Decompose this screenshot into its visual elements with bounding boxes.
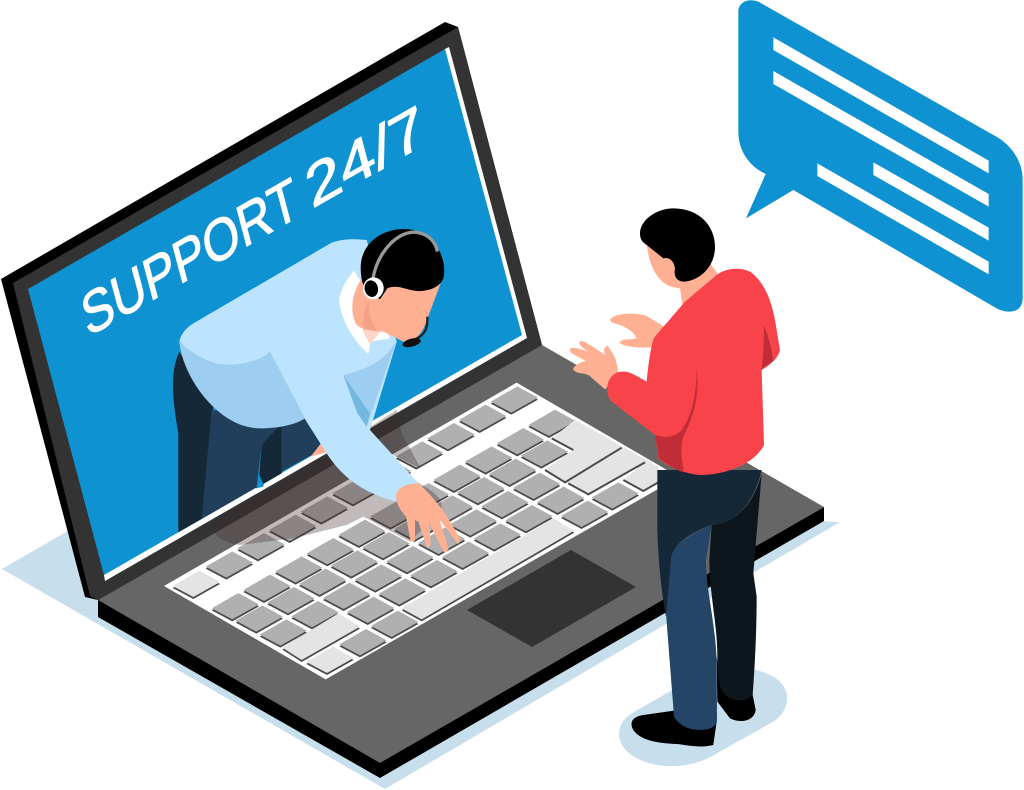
screen heading: SUPPORT xyxy=(75,165,305,350)
red sweater xyxy=(607,269,780,475)
agent collar xyxy=(339,271,390,354)
support agent xyxy=(173,229,461,553)
speech bubble xyxy=(738,0,1023,312)
agent shirt xyxy=(179,239,420,502)
agent neck xyxy=(362,328,381,345)
floor shadow under feet xyxy=(619,670,787,766)
agent trousers xyxy=(173,352,328,532)
ground shadow under laptop xyxy=(2,495,840,789)
laptop base xyxy=(98,345,824,778)
person head and neck xyxy=(647,233,720,307)
person legs xyxy=(632,470,762,746)
arm shadow on keyboard xyxy=(210,410,441,545)
screen heading xyxy=(75,93,432,350)
agent head xyxy=(352,229,444,342)
person upper hand xyxy=(610,314,667,348)
person hair xyxy=(640,208,715,282)
keyboard xyxy=(164,383,679,679)
headset xyxy=(361,232,437,349)
person upper body xyxy=(571,208,780,475)
agent hand xyxy=(396,483,461,553)
trackpad xyxy=(467,550,636,647)
person lower hand xyxy=(571,342,617,388)
standing person xyxy=(571,208,787,766)
sweater fold shading xyxy=(655,368,698,473)
sleeve fold shading xyxy=(762,325,773,369)
screen heading: 24/7 xyxy=(299,93,432,221)
laptop screen xyxy=(1,22,542,600)
